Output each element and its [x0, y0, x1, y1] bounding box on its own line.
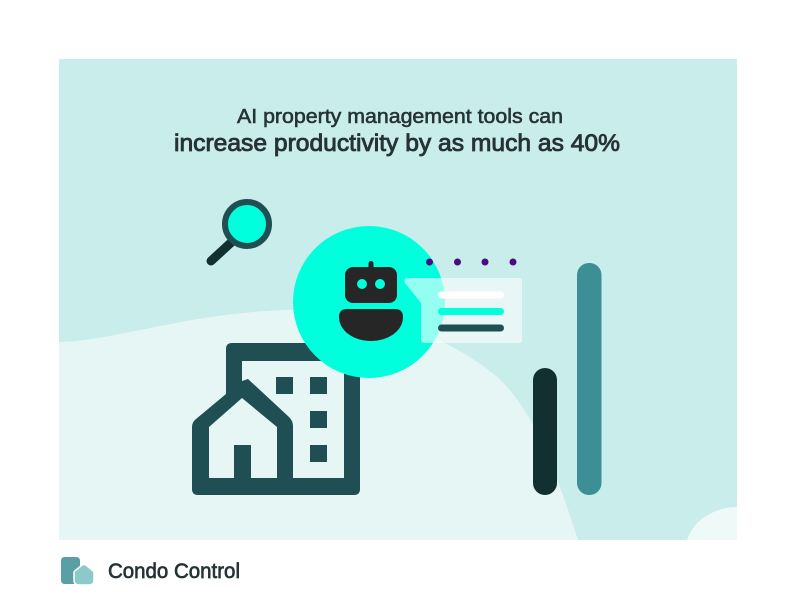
- background hill: [59, 310, 578, 540]
- background corner hill: [687, 507, 737, 540]
- logo: Condo Control: [61, 557, 240, 585]
- bar: short dark: [533, 368, 557, 495]
- icon: building and house: [192, 343, 360, 495]
- title: AI property management tools can: [237, 106, 563, 128]
- title: [174, 106, 620, 157]
- panel: background: [59, 59, 737, 540]
- logo: Condo Control: Condo Control: [108, 560, 240, 583]
- dots: [426, 258, 516, 266]
- chat bubble: [404, 278, 522, 343]
- bar: tall teal: [577, 263, 602, 495]
- icon: robot circle: [293, 226, 445, 378]
- icon: magnifying glass: [211, 202, 269, 261]
- icon: robot: [339, 261, 403, 341]
- title: increase productivity by as much as 40%: [174, 130, 620, 157]
